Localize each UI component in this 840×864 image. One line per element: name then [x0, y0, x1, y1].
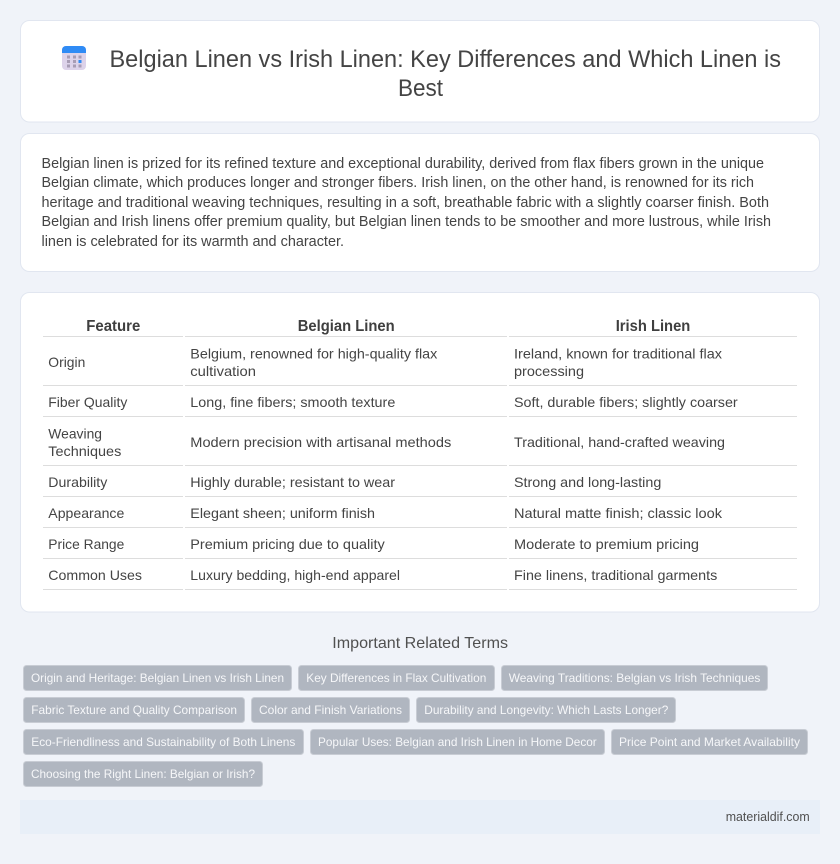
- tag: [24, 698, 244, 722]
- tag: Eco-Friendliness and Sustainability of Both Linens: [31, 735, 295, 749]
- text block: intro: heritage and traditional weaving techniques, resulting in a soft, breathable fabric with a slightly coarser finish. Both: [42, 195, 769, 211]
- table row: weaving techniques: [48, 425, 725, 459]
- tag: [24, 762, 262, 786]
- tag: [24, 730, 304, 754]
- text block: intro: [42, 156, 771, 250]
- table row: durability: Strong and long-lasting: [514, 474, 661, 490]
- tag: Color and Finish Variations: [259, 703, 402, 717]
- table row: origin: [48, 345, 722, 379]
- title: Belgian Linen vs Irish Linen: Key Differences and Which Linen is: [110, 46, 781, 73]
- tag: Key Differences in Flax Cultivation: [306, 671, 486, 685]
- table row: common uses: Fine linens, traditional garments: [514, 567, 717, 583]
- footer: [20, 800, 820, 834]
- title: [110, 46, 781, 102]
- tag: [612, 730, 808, 754]
- table row: weaving techniques: Modern precision with artisanal methods: [190, 434, 451, 450]
- table row: origin: Origin: [48, 354, 85, 370]
- table row: appearance: Elegant sheen; uniform finish: [190, 505, 375, 521]
- table header: [86, 318, 690, 335]
- table header: Feature: [86, 318, 140, 335]
- table row: weaving techniques: Traditional, hand-crafted weaving: [514, 434, 725, 450]
- table row: price range: [48, 536, 699, 552]
- footer: materialdif.com: [726, 810, 810, 824]
- tag: [298, 666, 494, 690]
- icon: calendar: [62, 46, 86, 70]
- table row: origin: cultivation: [190, 363, 256, 379]
- table row: price range: Premium pricing due to quality: [190, 536, 385, 552]
- table row: price range: Moderate to premium pricing: [514, 536, 699, 552]
- table row: durability: Durability: [48, 474, 107, 490]
- tag list: related terms: [24, 666, 808, 786]
- tag: Choosing the Right Linen: Belgian or Irish?: [31, 767, 255, 781]
- text block: intro: Belgian and Irish linens offer premium quality, but Belgian linen tends to be smoother and more lustrous, while Irish: [42, 214, 771, 230]
- table row: origin: Belgium, renowned for high-quality flax: [190, 345, 437, 361]
- table row: weaving techniques: Techniques: [48, 443, 121, 459]
- table row: fiber quality: Fiber Quality: [48, 394, 127, 410]
- text block: intro: Belgian climate, which produces longer and stronger fibers. Irish linen, on the other hand, is renowned for its rich: [42, 175, 754, 191]
- table header: Irish Linen: [616, 318, 690, 335]
- tag: Origin and Heritage: Belgian Linen vs Irish Linen: [31, 671, 284, 685]
- tag: [310, 730, 604, 754]
- tag: [416, 698, 676, 722]
- table row: durability: Highly durable; resistant to wear: [190, 474, 395, 490]
- table row: appearance: Natural matte finish; classic look: [514, 505, 723, 521]
- title: Best: [398, 75, 443, 102]
- text block: intro: Belgian linen is prized for its refined texture and exceptional durability, derived from flax fibers grown in the unique: [42, 156, 764, 172]
- table row: common uses: [48, 567, 717, 583]
- heading: related terms: Important Related Terms: [332, 635, 508, 652]
- panel: comparison table: [20, 292, 820, 612]
- table row: weaving techniques: Weaving: [48, 425, 102, 441]
- text block: intro: linen is celebrated for its warmth and character.: [42, 234, 344, 250]
- table row: common uses: Luxury bedding, high-end apparel: [190, 567, 400, 583]
- panel: title header: [20, 20, 820, 122]
- table row: durability: [48, 474, 661, 490]
- table row: origin: Ireland, known for traditional flax: [514, 345, 722, 361]
- table row: fiber quality: [48, 394, 738, 410]
- table header: Belgian Linen: [298, 318, 395, 335]
- tag: [502, 666, 768, 690]
- tag: Fabric Texture and Quality Comparison: [31, 703, 237, 717]
- table row: fiber quality: Soft, durable fibers; slightly coarser: [514, 394, 738, 410]
- table row: appearance: [48, 505, 723, 521]
- table row: origin: processing: [514, 363, 584, 379]
- tag: Popular Uses: Belgian and Irish Linen in Home Decor: [318, 735, 597, 749]
- panel: intro paragraph: [20, 134, 820, 272]
- tag: [24, 666, 292, 690]
- tag: [252, 698, 410, 722]
- table row: appearance: Appearance: [48, 505, 125, 521]
- tag: Price Point and Market Availability: [619, 735, 800, 749]
- table row: price range: Price Range: [48, 536, 125, 552]
- table row: common uses: Common Uses: [48, 567, 142, 583]
- table row: fiber quality: Long, fine fibers; smooth texture: [190, 394, 396, 410]
- tag: Weaving Traditions: Belgian vs Irish Techniques: [509, 671, 760, 685]
- tag: Durability and Longevity: Which Lasts Longer?: [424, 703, 669, 717]
